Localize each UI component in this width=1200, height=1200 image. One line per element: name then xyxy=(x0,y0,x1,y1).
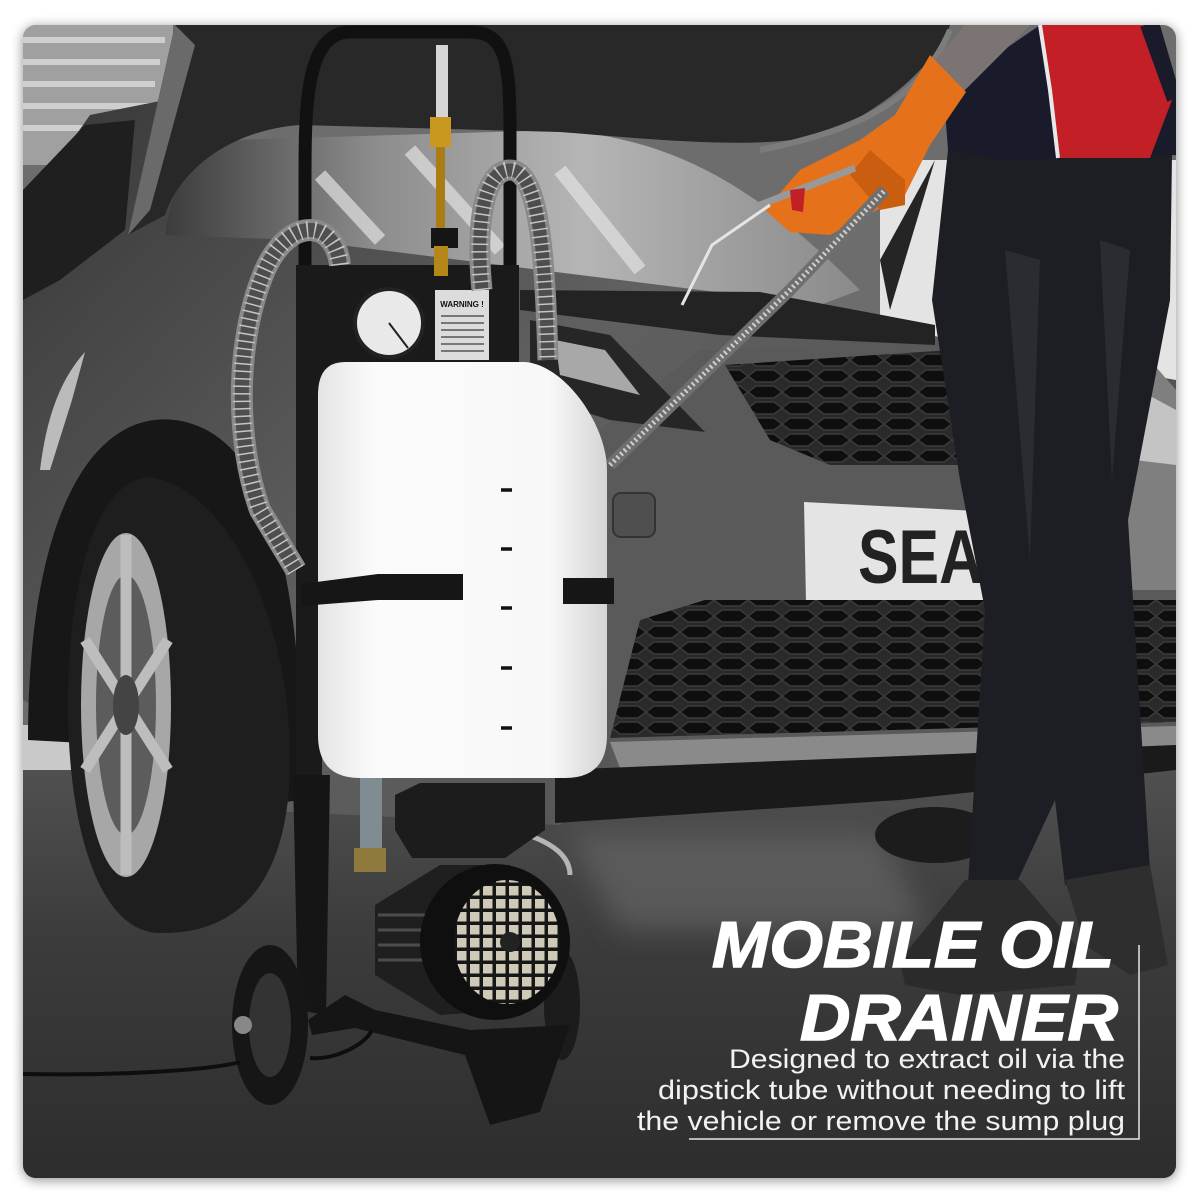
title: DRAINER xyxy=(800,981,1118,1054)
under shadow xyxy=(875,807,972,863)
plate text: SEA xyxy=(858,515,983,600)
warning label xyxy=(435,290,489,360)
tattooed arm xyxy=(935,25,1030,95)
windscreen xyxy=(165,130,860,305)
rear wheel xyxy=(544,950,580,1060)
oil extraction gun xyxy=(760,168,855,205)
operator xyxy=(760,25,1176,995)
windscreen streaks xyxy=(320,150,640,270)
tank straps xyxy=(301,574,463,606)
pump connection xyxy=(360,778,382,848)
power cable xyxy=(23,1030,372,1074)
description text: the vehicle or remove the sump plug xyxy=(637,1106,1125,1136)
floor xyxy=(23,770,1176,1178)
base plate xyxy=(308,995,570,1125)
wheel arch xyxy=(28,419,300,810)
description text xyxy=(637,1044,1126,1136)
pressure gauge xyxy=(357,291,421,355)
number plate xyxy=(804,502,983,600)
car xyxy=(23,25,1176,933)
tyre xyxy=(69,742,288,933)
orange glove xyxy=(765,55,966,235)
clear hose left xyxy=(242,230,340,570)
motor body xyxy=(375,865,510,1015)
side window xyxy=(23,120,135,300)
flexible probe hose xyxy=(610,190,885,465)
description text: Designed to extract oil via the xyxy=(729,1044,1125,1074)
motor fan cover xyxy=(420,864,570,1020)
floor reflection xyxy=(570,835,930,930)
white tank xyxy=(318,362,607,778)
trousers xyxy=(932,150,1172,885)
front bumper and bonnet edge xyxy=(891,590,1176,734)
description text: dipstick tube without needing to lift xyxy=(658,1075,1126,1105)
shoes xyxy=(900,880,1080,995)
car body xyxy=(23,100,1176,825)
grey cable xyxy=(490,825,570,875)
gauge panel xyxy=(322,265,519,375)
title: MOBILE OIL xyxy=(712,908,1114,981)
fender highlight xyxy=(40,352,85,470)
title xyxy=(712,908,1118,1054)
upper grille xyxy=(725,350,965,465)
caption bracket line xyxy=(689,945,1139,1139)
warning label: WARNING ! xyxy=(440,300,484,309)
clear hose right xyxy=(480,170,548,360)
engine bay xyxy=(520,290,935,345)
lower grille xyxy=(610,600,1176,738)
terminal box xyxy=(395,783,545,858)
level marks xyxy=(501,490,512,728)
jacket red panel xyxy=(1040,25,1172,158)
brass dipstick fitting xyxy=(430,45,458,276)
tow eye cover xyxy=(613,493,655,537)
trolley frame xyxy=(305,32,510,300)
open bonnet xyxy=(128,25,950,235)
jacket xyxy=(945,25,1176,160)
bumper lip xyxy=(610,726,1176,768)
headlight xyxy=(530,320,705,432)
front wheel xyxy=(232,945,308,1105)
right car behind xyxy=(1128,368,1176,590)
alloy wheel xyxy=(81,533,171,877)
oil drainer trolley xyxy=(232,32,614,1125)
